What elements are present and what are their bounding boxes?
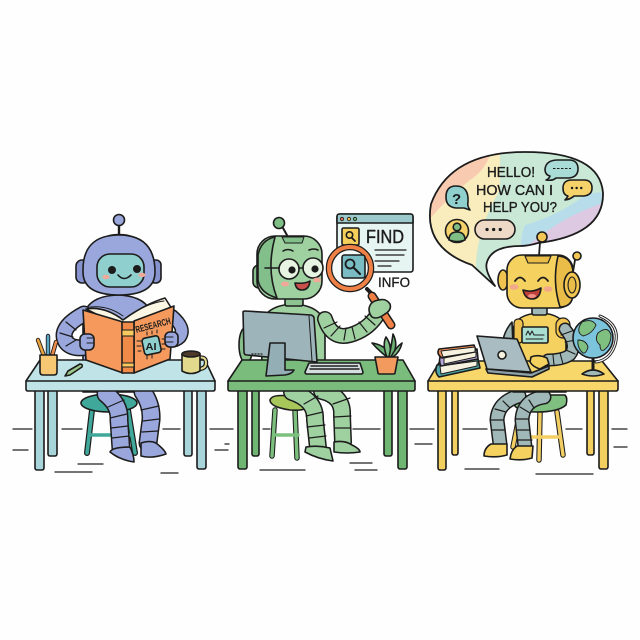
- bubble text: [476, 164, 557, 216]
- robot body: lavender: [60, 295, 182, 392]
- robot torso: yellow: [503, 307, 570, 392]
- robot head: lavender: [76, 214, 161, 295]
- scene: research robot: [26, 214, 215, 470]
- chat icons: ?: [452, 191, 461, 208]
- robot arm and hand: yellow and grey: [530, 329, 576, 369]
- robot hand: green: [369, 300, 390, 318]
- browser window: FIND: [337, 214, 413, 272]
- robot legs: grey-teal: [484, 396, 544, 460]
- pencil cup: [38, 336, 57, 375]
- desk: pale blue: [26, 360, 215, 470]
- potted plant: [372, 334, 402, 374]
- robot hands: lavender: [80, 332, 178, 350]
- desk: green: [228, 360, 415, 469]
- scene: helper robot: [425, 150, 618, 470]
- bubble text: HOW CAN I: [476, 182, 553, 199]
- laptop: [477, 336, 549, 377]
- open book: RESEARCH AI: [83, 298, 174, 373]
- robot legs: lavender: [106, 392, 166, 462]
- keyboard: [305, 363, 363, 374]
- bubble text: HELP YOU?: [483, 199, 557, 216]
- robot legs: green: [292, 391, 360, 461]
- speech bubble: [425, 150, 610, 290]
- chat icons: [446, 160, 592, 242]
- stool: teal: [81, 394, 137, 453]
- robot head: yellow: [498, 232, 581, 308]
- scene: search robot: [228, 214, 415, 469]
- mug: [182, 351, 206, 374]
- stool: green: [270, 396, 307, 458]
- label: INFO: INFO: [378, 274, 410, 290]
- pencil on desk: [65, 364, 82, 376]
- computer monitor: [243, 311, 317, 376]
- robot head: green: [253, 218, 323, 299]
- stack of books: [436, 345, 480, 377]
- stool: green: [513, 395, 567, 460]
- robot torso and arm: green: [239, 298, 378, 365]
- bubble text: HELLO!: [487, 164, 535, 181]
- browser window: FIND: FIND: [366, 227, 404, 247]
- desk globe: [573, 316, 616, 376]
- desk: yellow: [428, 361, 618, 470]
- magnifying glass: [329, 247, 391, 325]
- illustration: three robots at desks: [12, 151, 628, 475]
- open book: RESEARCH AI: RESEARCH: [134, 316, 172, 336]
- open book: RESEARCH AI: AI: [146, 341, 157, 353]
